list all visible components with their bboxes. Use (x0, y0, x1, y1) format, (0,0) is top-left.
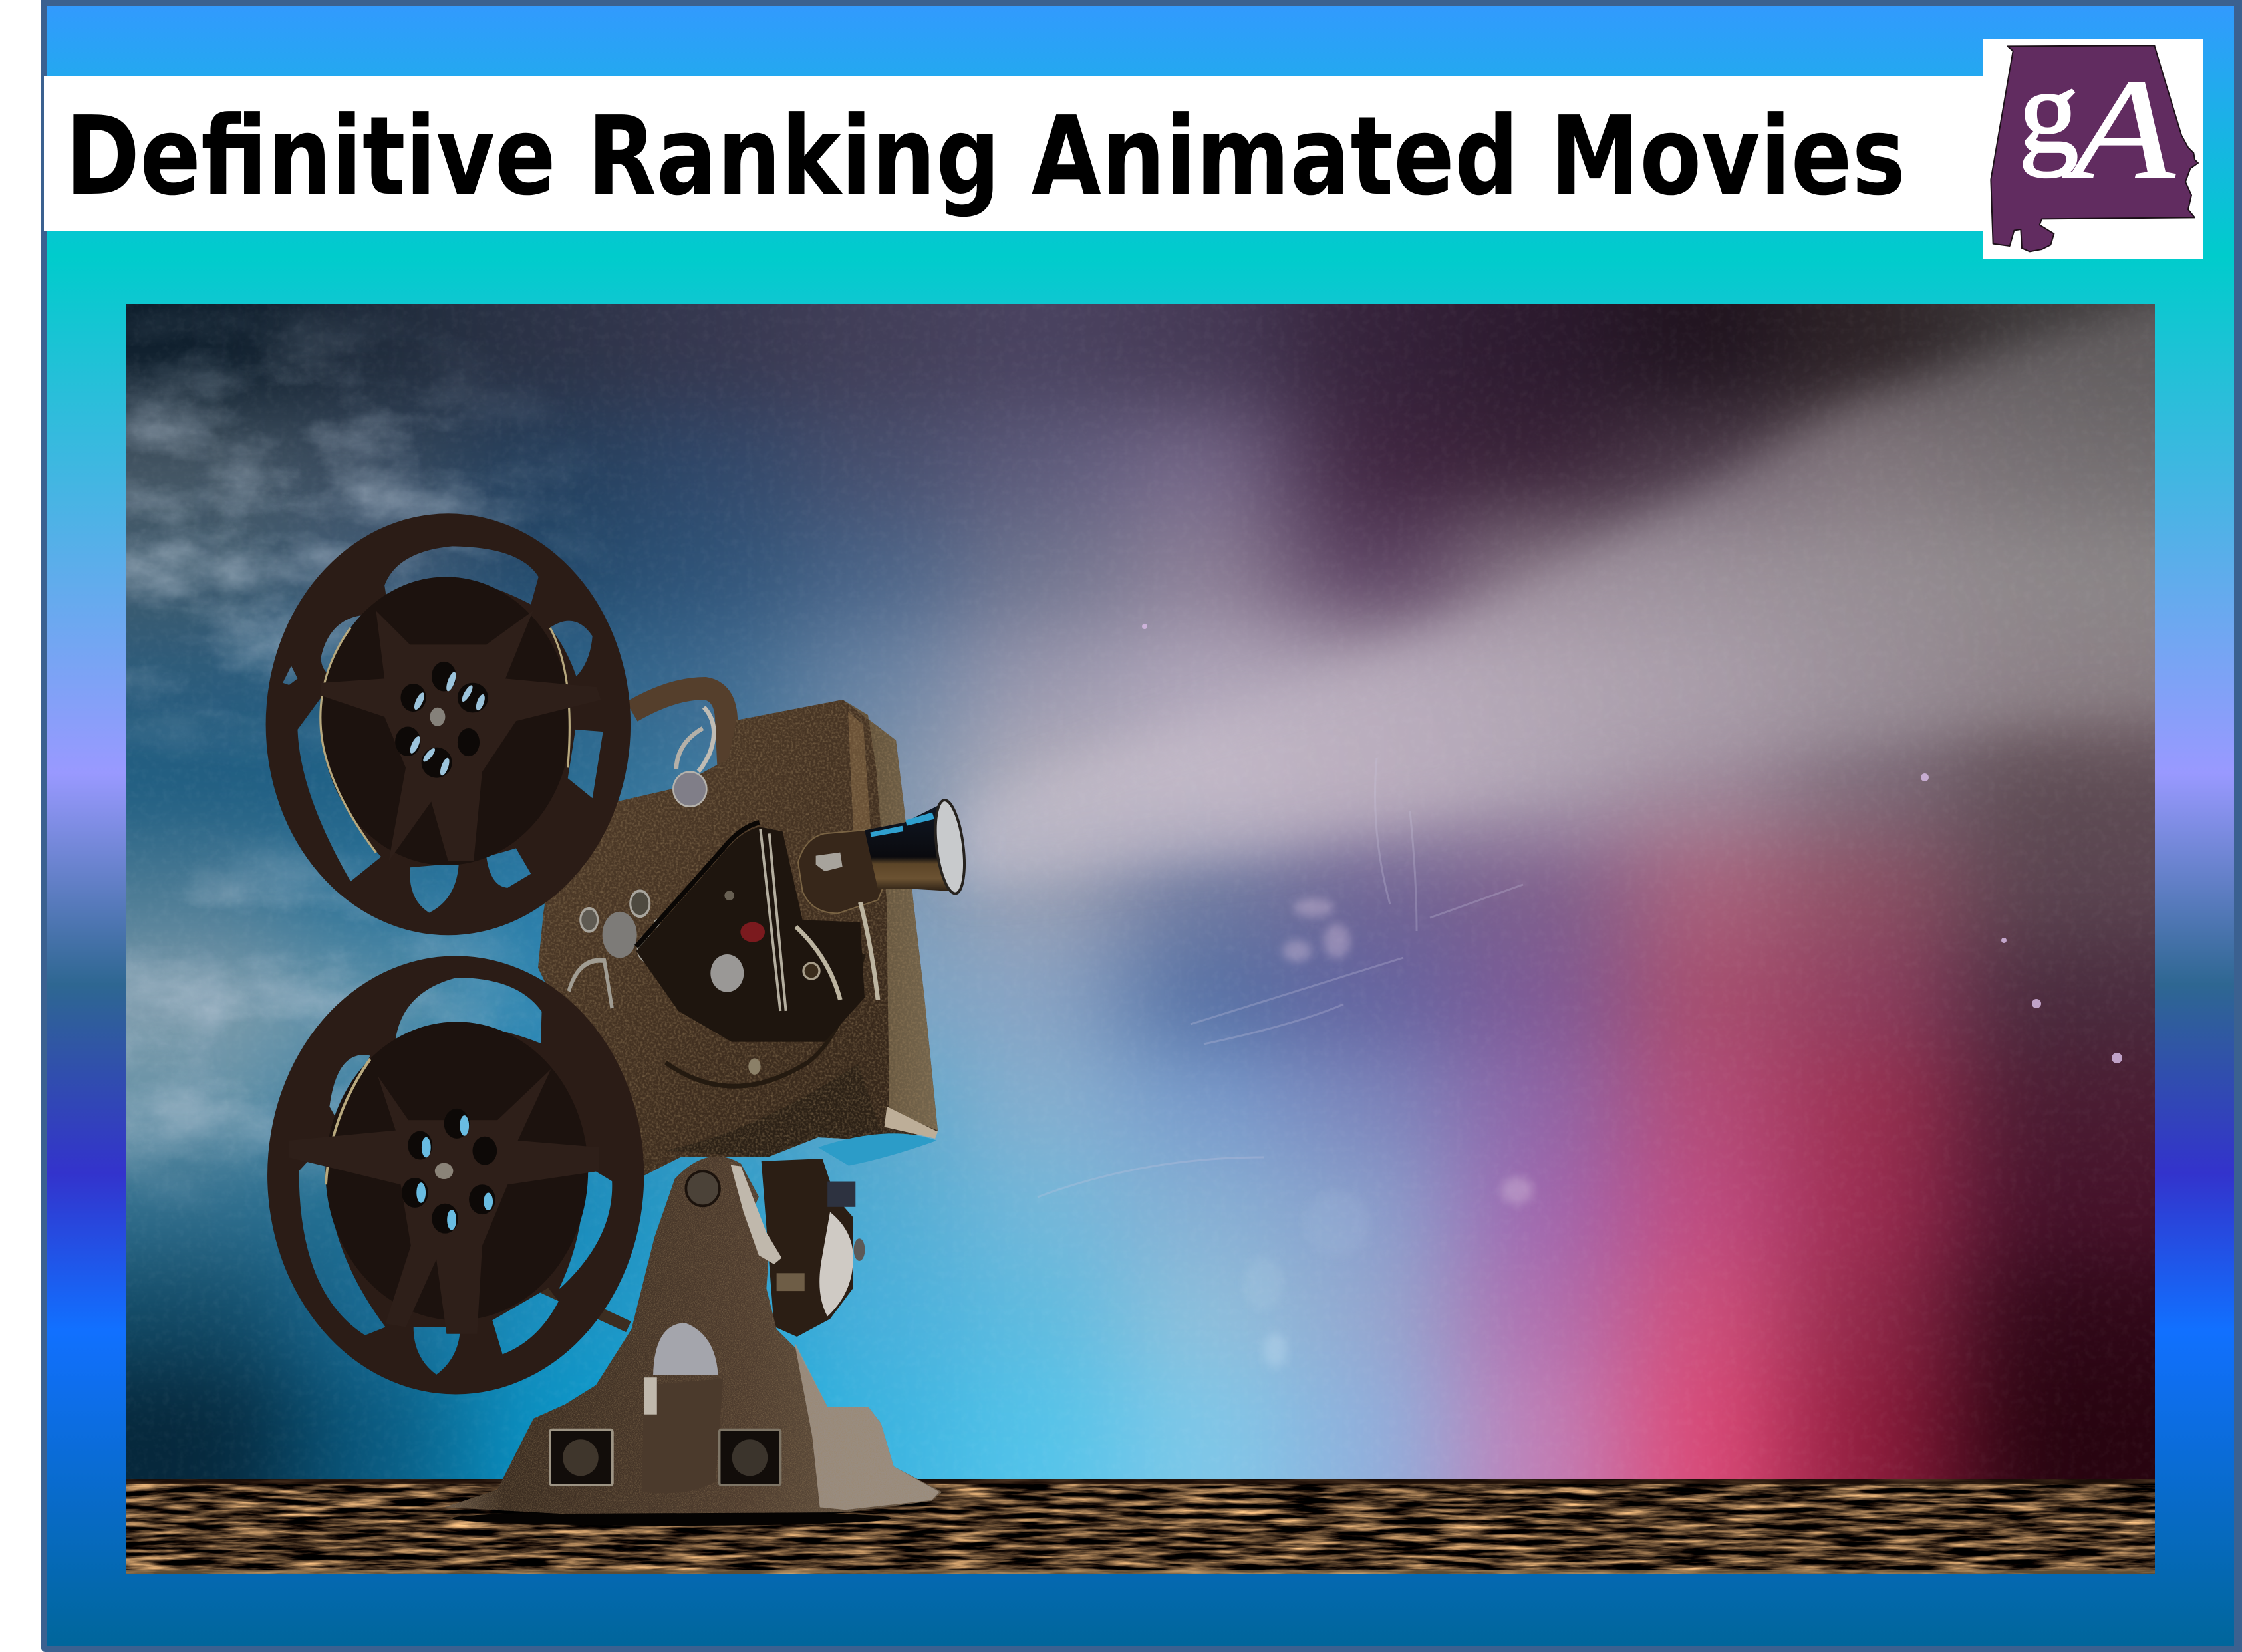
projector stand (444, 1157, 942, 1514)
lens assembly, ring, plate (636, 707, 969, 1042)
logo letters: A (2062, 49, 2176, 209)
film wound on top reel (321, 577, 571, 865)
curved silver arm (796, 902, 878, 1000)
photo: vintage film projector with light beam (126, 304, 2155, 1574)
logo letters: g (2019, 45, 2078, 178)
lamp cylinder (642, 1379, 723, 1493)
ring and bulb (673, 707, 714, 807)
logo: gA Alabama state mark (1983, 39, 2203, 259)
round grey button (710, 954, 744, 992)
red button (740, 922, 765, 942)
stand screw (686, 1171, 720, 1206)
right nameplate (720, 1430, 780, 1485)
small arm knob (803, 963, 819, 979)
chrome clamp on barrel (816, 853, 843, 871)
bottom film reel (267, 956, 644, 1395)
icon: Alabama state silhouette (1991, 45, 2198, 251)
dust grain overlay (126, 304, 2155, 1574)
pale film edge of top reel (321, 628, 569, 853)
projector body (538, 700, 938, 1178)
projector (266, 513, 969, 1514)
control knobs and lower plate details (569, 891, 864, 1086)
lamp clip (644, 1377, 657, 1415)
scratches and dust specks (1038, 624, 2122, 1367)
silver plate strip (760, 829, 786, 1011)
side rod behind lower reel (542, 1287, 629, 1327)
black gap outline of plate (636, 823, 760, 946)
lamp cap (653, 1323, 718, 1375)
spokes of bottom reel (289, 1069, 599, 1334)
smoke texture at left (126, 313, 587, 1197)
hub holes of bottom reel (402, 1109, 497, 1234)
spokes of top reel (321, 611, 601, 861)
lens mouth (931, 799, 969, 895)
motor housing (762, 1159, 865, 1337)
dark control plate (636, 827, 865, 1042)
pale trim along housing edge (885, 1107, 938, 1139)
top film reel (266, 513, 631, 935)
lens barrel (865, 806, 951, 891)
highlight along neck (731, 1165, 781, 1264)
small screw on plate (724, 891, 734, 900)
stand, motor, lamp and nameplates (444, 1157, 942, 1514)
bright metal on stand base (794, 1342, 940, 1510)
pale film edge of bottom reel (326, 1059, 370, 1184)
blue highlight under housing (818, 1133, 936, 1166)
title band (44, 76, 1983, 231)
wooden table surface (126, 1476, 2155, 1576)
projector carrying arm (632, 688, 729, 775)
hub holes of top reel (395, 662, 488, 778)
left nameplate (550, 1430, 613, 1485)
film wound on bottom reel (325, 1022, 588, 1320)
blue reflection on barrel (870, 813, 934, 837)
logo letters (2019, 45, 2176, 209)
light beam from the projector lens (958, 286, 2195, 888)
lens housing (798, 829, 887, 913)
